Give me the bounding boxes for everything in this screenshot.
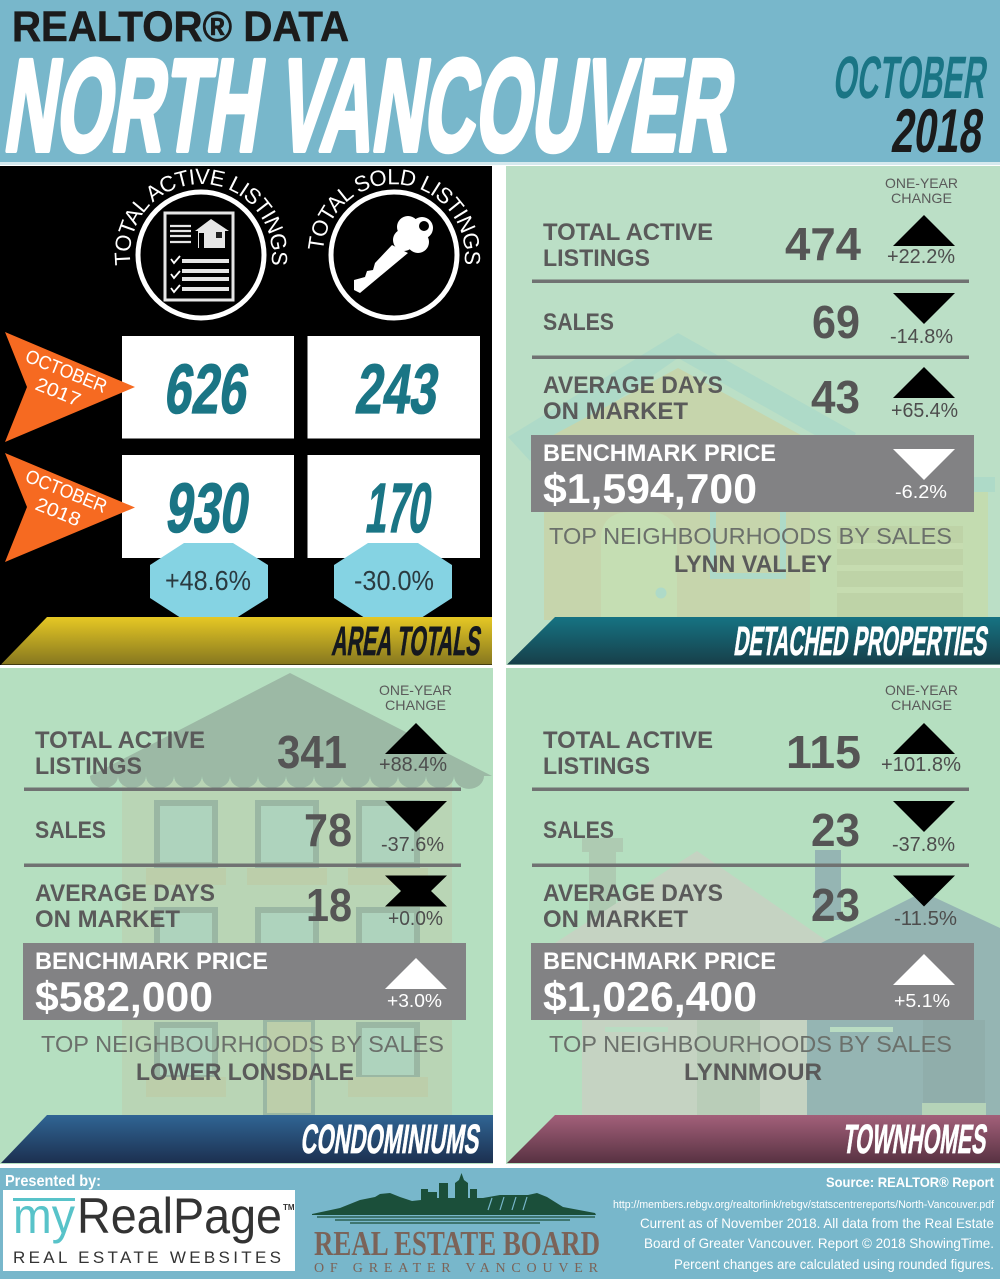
benchmark price bar: +5.1% — [894, 991, 950, 1011]
stat row: total active listings 474 — [543, 215, 955, 272]
background: detached house illustration — [508, 333, 995, 620]
benchmark price bar — [531, 943, 974, 1020]
logo: myRealPage — [3, 1188, 295, 1271]
benchmark price bar — [23, 943, 466, 1020]
footer — [0, 1168, 1000, 1279]
stat row: average days on market 43: ON MARKET — [543, 398, 688, 425]
arrow: October 2017: OCTOBER — [22, 346, 110, 398]
column heading: one-year change: ONE-YEAR — [379, 682, 452, 698]
ribbon: condominiums — [1, 1115, 493, 1163]
badge: +48.6% — [150, 543, 268, 620]
panel: townhomes — [506, 668, 1000, 1164]
stat row: average days on market 18: AVERAGE DAYS — [35, 880, 215, 907]
curved label: total active listings: TOTAL ACTIVE LISTINGS — [114, 168, 288, 266]
heading: REALTOR DATA: REALTOR® DATA — [12, 3, 349, 51]
badge: +48.6%: +48.6% — [165, 565, 251, 596]
stat row: total active listings 341: TOTAL ACTIVE — [35, 727, 205, 754]
column heading: one-year change — [885, 175, 958, 206]
benchmark price bar: +3.0% — [387, 991, 442, 1011]
column heading: one-year change: CHANGE — [891, 697, 952, 713]
ribbon: condominiums: CONDOMINIUMS — [299, 1116, 483, 1162]
benchmark price bar: BENCHMARK PRICE — [543, 948, 776, 975]
stat row: sales 78: SALES — [35, 817, 106, 844]
stat row: total active listings 474: LISTINGS — [543, 245, 650, 272]
logo: myRealPage: my — [13, 1188, 75, 1244]
stat row: sales 23: 23 — [811, 804, 860, 856]
text: source credits: http://members.rebgv.org/realtorlink/rebgv/statscentrereports/North-Vancouver.pdf — [613, 1199, 995, 1211]
stat row: total active listings 341: +88.4% — [379, 754, 447, 776]
value box: 170 — [308, 455, 480, 558]
top neighbourhoods — [549, 523, 952, 578]
stat row: total active listings 474: TOTAL ACTIVE — [543, 219, 713, 246]
stat row: total active listings 341: LISTINGS — [35, 753, 142, 780]
top neighbourhoods — [549, 1031, 952, 1086]
top neighbourhoods: LYNNMOUR — [684, 1059, 822, 1086]
header banner — [0, 0, 1000, 178]
benchmark price bar: $1,026,400 — [543, 973, 757, 1020]
ribbon: area totals — [1, 617, 492, 664]
badge: -30.0%: -30.0% — [354, 565, 434, 596]
column heading: one-year change: CHANGE — [385, 697, 446, 713]
panel: condominiums — [0, 668, 493, 1164]
logo: Real Estate Board of Greater Vancouver — [312, 1173, 600, 1276]
column heading: one-year change — [379, 682, 452, 713]
stat row: average days on market 18: ON MARKET — [35, 906, 180, 933]
badge: -30.0% — [334, 543, 452, 620]
panel: detached properties — [506, 166, 1000, 665]
benchmark price bar: -6.2% — [895, 482, 947, 502]
stat row: sales 78: 78 — [304, 804, 352, 856]
stat row: sales 69 — [543, 293, 955, 348]
stat row: sales 69: 69 — [812, 296, 860, 348]
text: source credits — [613, 1174, 995, 1272]
logo: Real Estate Board of Greater Vancouver: OF GREATER VANCOUVER — [314, 1261, 599, 1276]
stat row: total active listings 341 — [35, 723, 447, 780]
stat row: average days on market 43: AVERAGE DAYS — [543, 372, 723, 399]
stat row: average days on market 23 — [543, 876, 957, 933]
stat row: sales 69: SALES — [543, 309, 614, 336]
top neighbourhoods — [41, 1031, 444, 1086]
stat row: average days on market 23: -11.5% — [894, 908, 957, 930]
value box: 170: 170 — [362, 468, 438, 547]
panel: area totals — [0, 166, 516, 665]
value box: 930: 930 — [162, 468, 256, 547]
arrow: October 2017 — [5, 332, 135, 442]
stat row: total active listings 115 — [543, 723, 961, 780]
text: source credits: Board of Greater Vancouver. Report © 2018 ShowingTime. — [644, 1235, 994, 1251]
benchmark price bar: BENCHMARK PRICE — [35, 948, 268, 975]
stat row: sales 69: -14.8% — [890, 326, 953, 348]
column heading: one-year change: ONE-YEAR — [885, 175, 958, 191]
column heading: one-year change: ONE-YEAR — [885, 682, 958, 698]
stat row: total active listings 474: 474 — [785, 218, 861, 270]
value box: 626 — [122, 336, 294, 438]
icon: listing document in circle — [138, 192, 264, 318]
stat row: total active listings 115: 115 — [786, 726, 861, 778]
value box: 626: 626 — [161, 349, 255, 428]
text: source credits: Current as of November 2018. All data from the Real Estate — [640, 1215, 994, 1231]
top neighbourhoods: TOP NEIGHBOURHOODS BY SALES — [41, 1031, 444, 1057]
stat row: sales 23 — [543, 801, 955, 856]
stat row: total active listings 474: +22.2% — [887, 246, 955, 268]
stat row: average days on market 43 — [543, 367, 958, 425]
background: townhouse illustration — [555, 838, 1000, 1115]
benchmark price bar: BENCHMARK PRICE — [543, 440, 776, 467]
text: presented by: Presented by: — [5, 1173, 101, 1190]
top neighbourhoods: LYNN VALLEY — [674, 551, 832, 578]
logo: myRealPage: REAL ESTATE WEBSITES — [13, 1248, 281, 1267]
icon: key in circle — [331, 192, 457, 318]
top neighbourhoods: LOWER LONSDALE — [136, 1059, 354, 1086]
logo: myRealPage: TM — [283, 1203, 295, 1212]
value box: 243: 243 — [352, 349, 445, 428]
stat row: average days on market 23: AVERAGE DAYS — [543, 880, 723, 907]
stat row: total active listings 115: +101.8% — [881, 754, 961, 776]
arrow: October 2017: 2017 — [32, 374, 84, 411]
top neighbourhoods: TOP NEIGHBOURHOODS BY SALES — [549, 523, 952, 549]
top neighbourhoods: TOP NEIGHBOURHOODS BY SALES — [549, 1031, 952, 1057]
background: condo building illustration — [90, 673, 492, 1115]
benchmark price bar: $582,000 — [35, 973, 213, 1020]
value box: 243 — [308, 336, 480, 438]
stat row: sales 78 — [35, 801, 447, 856]
stat row: average days on market 18: +0.0% — [388, 908, 443, 930]
ribbon: area totals: AREA TOTALS — [330, 618, 484, 664]
stat row: average days on market 18 — [35, 876, 447, 933]
stat row: average days on market 23: ON MARKET — [543, 906, 688, 933]
stat row: sales 78: -37.6% — [381, 834, 444, 856]
benchmark price bar: $1,594,700 — [543, 465, 757, 512]
stat row: total active listings 115: LISTINGS — [543, 753, 650, 780]
curved label: total sold listings: TOTAL SOLD LISTINGS — [308, 169, 480, 264]
stat row: average days on market 23: 23 — [811, 879, 860, 931]
stat row: total active listings 115: TOTAL ACTIVE — [543, 727, 713, 754]
arrow: October 2018 — [5, 453, 135, 562]
stat row: average days on market 43: +65.4% — [891, 400, 958, 422]
arrow: October 2018: OCTOBER — [22, 466, 110, 518]
logo: myRealPage: RealPage — [77, 1188, 282, 1244]
ribbon: townhomes — [507, 1115, 1000, 1163]
ribbon: detached properties — [507, 617, 1000, 664]
stat row: average days on market 43: 43 — [811, 371, 860, 423]
column heading: one-year change: CHANGE — [891, 190, 952, 206]
column heading: one-year change — [885, 682, 958, 713]
value box: 930 — [122, 455, 294, 558]
stat row: average days on market 18: 18 — [306, 879, 352, 931]
benchmark price bar — [531, 435, 974, 512]
logo: Real Estate Board of Greater Vancouver: REAL ESTATE BOARD — [314, 1224, 600, 1263]
stat row: sales 23: -37.8% — [892, 834, 955, 856]
arrow: October 2018: 2018 — [32, 494, 84, 531]
stat row: sales 23: SALES — [543, 817, 614, 844]
stat row: total active listings 341: 341 — [277, 726, 347, 778]
